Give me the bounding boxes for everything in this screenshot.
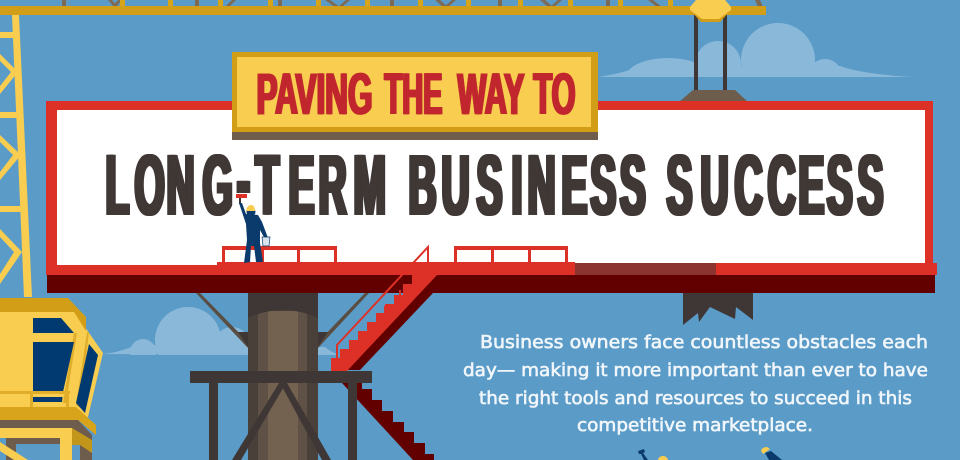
cab windows <box>33 318 98 413</box>
tower: lattice crane mast <box>0 15 32 297</box>
lower stairs <box>342 383 434 460</box>
title: long-term business success: BUSINESS <box>409 138 646 232</box>
intro paragraph: competitive marketplace. <box>577 416 813 436</box>
title: long-term business success <box>106 133 883 232</box>
bottom worker: hammer <box>638 449 668 460</box>
cab base <box>0 407 96 435</box>
railing: right <box>454 246 568 263</box>
crane top beam <box>0 0 766 15</box>
billboard <box>46 101 937 293</box>
cab rail <box>0 391 70 407</box>
scaffold platform <box>190 371 372 460</box>
cloud: upper right <box>598 23 910 77</box>
painter worker <box>236 194 270 263</box>
torn billboard piece <box>683 293 753 325</box>
upper stairs <box>331 247 447 371</box>
billboard panel <box>57 110 925 265</box>
title: long-term business success: SUCCESS <box>667 138 883 232</box>
subtitle: paving the way to <box>256 62 576 127</box>
central column <box>248 290 318 460</box>
billboard frame <box>46 101 933 271</box>
bottom worker: right <box>761 447 782 460</box>
catwalk <box>46 262 937 275</box>
subtitle: paving the way to: THE <box>384 62 442 127</box>
subtitle: paving the way to: WAY <box>458 62 524 127</box>
cable anchor base <box>679 90 748 102</box>
crane cab <box>0 298 103 460</box>
stair handrail <box>337 247 428 358</box>
crane hub <box>690 0 731 22</box>
support struts <box>196 293 369 348</box>
cab body <box>0 310 103 417</box>
subtitle sign <box>232 52 598 140</box>
cloud: lower left <box>104 307 340 355</box>
intro paragraph <box>463 333 928 436</box>
intro paragraph: day— making it more important than ever to have <box>463 361 928 381</box>
subtitle: paving the way to: PAVING <box>256 62 372 127</box>
title: long-term business success: LONG-TERM <box>106 133 386 232</box>
intro paragraph: Business owners face countless obstacles each <box>480 333 928 353</box>
subtitle: paving the way to: TO <box>534 62 576 127</box>
billboard underside <box>47 275 935 293</box>
intro paragraph: the right tools and resources to succeed in this <box>479 389 912 409</box>
crane cables <box>694 15 727 93</box>
railing: left <box>222 246 337 263</box>
